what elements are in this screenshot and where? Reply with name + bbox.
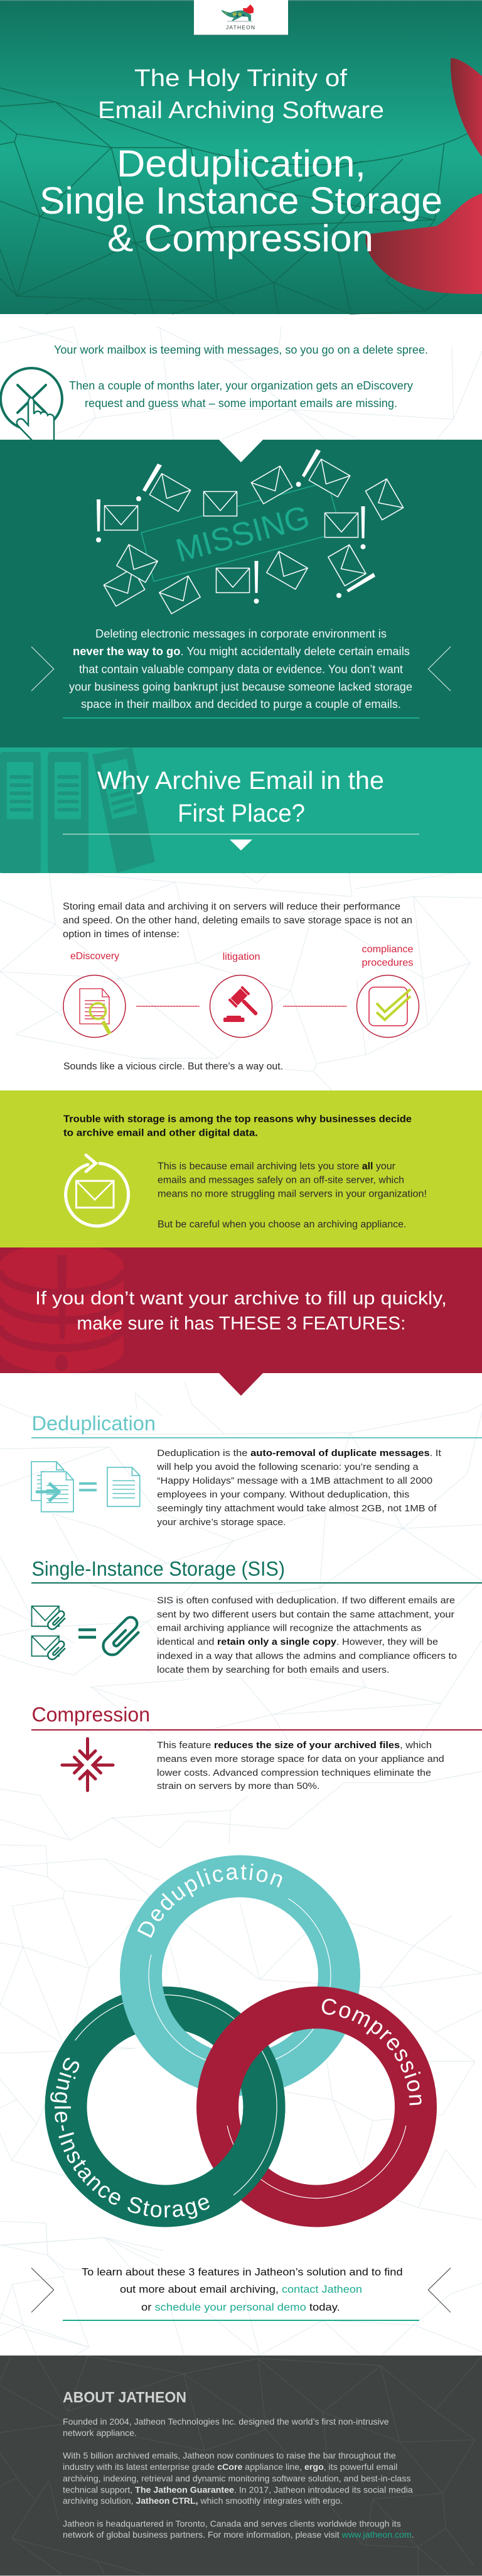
heading: why archive bbox=[97, 767, 384, 827]
text: vicious circle: Sounds like a vicious circle. But there’s a way out. bbox=[63, 1062, 283, 1072]
text block: storing email bbox=[63, 901, 412, 940]
text: SIS description: sent by two different users but contain the same attachment, your bbox=[157, 1609, 454, 1620]
heading: these 3 features: If you don’t want your archive to fill up quickly, bbox=[35, 1288, 447, 1309]
text: company description bbox=[63, 2416, 414, 2540]
call to action bbox=[31, 2266, 451, 2321]
panel: header banner bbox=[0, 0, 482, 314]
label: litigation: litigation bbox=[223, 952, 260, 962]
notch arrow bbox=[219, 440, 263, 462]
text: deduplication description: your archive’s storage space. bbox=[157, 1517, 286, 1528]
panel: trouble with storage bbox=[0, 1090, 482, 1247]
panel: deduplication bbox=[31, 1412, 482, 1528]
text: deduplication description bbox=[156, 1448, 442, 1528]
text block: storing email: and speed. On the other hand, deleting emails to save storage space is not an bbox=[63, 915, 412, 926]
text: contact jatheon: To learn about these 3 features in Jatheon’s solution and to find bbox=[82, 2266, 403, 2278]
text: archiving explanation: emails and messages safely on an off-site server, which bbox=[158, 1175, 404, 1186]
title: subtitle lines: Email Archiving Software bbox=[98, 97, 384, 124]
text: company description: network of global business partners. For more information, please visit www.jatheon.com. bbox=[63, 2530, 414, 2540]
heading: about jatheon: ABOUT JATHEON bbox=[63, 2389, 186, 2406]
ring: deduplication bbox=[141, 1876, 339, 2075]
text block: delete spree intro: request and guess what – some important emails are missing. bbox=[85, 397, 397, 410]
arrow: left chevron bbox=[31, 2268, 54, 2312]
logo wordmark: JATHEON bbox=[226, 24, 255, 30]
icon: inward arrows bbox=[62, 1739, 113, 1790]
stamp: missing bbox=[141, 482, 341, 582]
text: bold statement: to archive email and other digital data. bbox=[63, 1128, 258, 1138]
text: company description: industry with its latest enterprise grade cCore appliance line, ergo, its powerful email bbox=[63, 2462, 397, 2472]
panel: compression bbox=[31, 1704, 482, 1791]
arrow: right chevron bbox=[428, 647, 451, 691]
text: SIS description: identical and retain only a single copy . However, they will be bbox=[157, 1637, 438, 1648]
icon: envelopes and paperclips bbox=[31, 1606, 144, 1661]
icon: circular arrow envelope bbox=[66, 1155, 129, 1226]
heading: deduplication: Deduplication bbox=[31, 1412, 156, 1435]
text: archiving explanation: means no more struggling mail servers in your organization! bbox=[158, 1189, 427, 1200]
heading: why archive: First Place? bbox=[178, 800, 305, 827]
arrow: down triangle bbox=[230, 839, 252, 851]
exclamation marks bbox=[96, 449, 375, 604]
ring overlap: green over teal bbox=[207, 2048, 285, 2220]
icon: database warning bbox=[0, 1243, 124, 1373]
label: compliance procedures: procedures bbox=[362, 957, 413, 969]
text: archiving explanation bbox=[158, 1161, 427, 1230]
text: company description: archiving solution, Jatheon CTRL, which smoothly integrates with ergo. bbox=[63, 2496, 343, 2506]
text: SIS description: indexed in a way that allows the admins and compliance officers to bbox=[157, 1651, 457, 1661]
logo box bbox=[194, 0, 288, 35]
text: compression description: This feature reduces the size of your archived files , which bbox=[157, 1740, 432, 1751]
text block: never the way to go: space in their mailbox and decided to purge a couple of emails. bbox=[81, 698, 401, 710]
ring overlap: green over red bbox=[188, 2124, 284, 2225]
diagram: ediscovery litigation compliance bbox=[63, 944, 419, 1038]
label: compliance procedures bbox=[362, 944, 414, 969]
label: compliance procedures: compliance bbox=[362, 944, 414, 955]
stamp: missing: MISSING bbox=[172, 499, 314, 570]
text: deduplication description: seemingly tiny attachment would take almost 2GB, not 1MB of bbox=[157, 1503, 437, 1514]
text: deduplication description: Deduplication is the auto-removal of duplicate messages . It bbox=[157, 1448, 442, 1459]
text: archiving explanation: This is because email archiving lets you store all your bbox=[158, 1161, 395, 1172]
text block: never the way to go: your business going bankrupt just because someone lacked storage bbox=[69, 681, 412, 693]
text block: never the way to go: never the way to go. You might accidentally delete certain emails bbox=[73, 645, 410, 658]
icon: fox bbox=[221, 4, 254, 22]
diagram: three interlocking rings bbox=[45, 1856, 437, 2227]
icon: finger deleting bbox=[1, 368, 62, 441]
text: company description: Founded in 2004, Jatheon Technologies Inc. designed the world’s first non-intrusive bbox=[63, 2416, 389, 2427]
title: main heading: Deduplication, bbox=[117, 143, 366, 185]
text: SIS description: email archiving appliance will recognize the attachments as bbox=[157, 1623, 422, 1634]
ring: compression bbox=[217, 2008, 415, 2206]
text: bold statement: Trouble with storage is among the top reasons why businesses decide bbox=[63, 1114, 412, 1125]
text: company description: Jatheon is headquartered in Toronto, Canada and serves clients worldwide through its bbox=[63, 2518, 401, 2528]
text: company description: With 5 billion archived emails, Jatheon now continues to raise the bar throughout the bbox=[63, 2450, 396, 2460]
panel: about jatheon bbox=[0, 2356, 482, 2576]
text block: delete spree intro: Then a couple of months later, your organization gets an eDiscovery bbox=[69, 379, 413, 392]
text: deduplication description: employees in your company. Without deduplication, this bbox=[157, 1489, 409, 1500]
icon: duplicate documents bbox=[31, 1462, 140, 1512]
text: archiving explanation: But be careful when you choose an archiving appliance. bbox=[158, 1219, 407, 1230]
text block: delete spree intro bbox=[54, 344, 428, 410]
text block: never the way to go bbox=[69, 628, 412, 710]
text: compression description bbox=[157, 1740, 444, 1791]
text: contact jatheon: or schedule your personal demo today. bbox=[141, 2302, 340, 2313]
title: main heading: Single Instance Storage bbox=[40, 180, 442, 222]
heading: SIS: Single-Instance Storage (SIS) bbox=[31, 1557, 285, 1580]
red decorative shape: lower right bbox=[365, 193, 482, 294]
text: deduplication description: will help you avoid the following scenario: you’re sending a bbox=[156, 1462, 419, 1472]
text: company description: network appliance. bbox=[63, 2428, 137, 2438]
text: SIS description: SIS is often confused with deduplication. If two different emails are bbox=[157, 1595, 455, 1606]
text block: never the way to go: Deleting electronic messages in corporate environment is bbox=[95, 628, 387, 640]
text block: never the way to go: that contain valuable company data or evidence. You don’t want bbox=[79, 663, 403, 676]
heading: compression: Compression bbox=[31, 1704, 150, 1726]
arrow: left chevron bbox=[31, 647, 54, 691]
ring label: deduplication: Deduplication bbox=[137, 1863, 282, 1938]
text: company description: archiving, indexing, retrieval and dynamic monitoring software solution, and best-in-class bbox=[63, 2473, 410, 2483]
text block: delete spree intro: Your work mailbox is teeming with messages, so you go on a delete spree. bbox=[54, 344, 428, 356]
text: deduplication description: “Happy Holidays” message with a 1MB attachment to all 2000 bbox=[157, 1475, 432, 1486]
icon: document magnifier bbox=[63, 975, 126, 1038]
text: SIS description: locate them by searching for both emails and users. bbox=[157, 1665, 389, 1675]
ring label: single-instance storage: Single-Instance Storage bbox=[50, 2058, 210, 2219]
panel: why archive email bbox=[0, 747, 482, 873]
red decorative shape: upper right bbox=[451, 58, 482, 157]
title: subtitle lines: The Holy Trinity of bbox=[134, 65, 347, 92]
text block: storing email: Storing email data and archiving it on servers will reduce their performance bbox=[63, 901, 400, 912]
heading: these 3 features bbox=[35, 1288, 447, 1334]
title: subtitle lines bbox=[98, 65, 384, 124]
ring label: compression: Compression bbox=[321, 1999, 422, 2106]
text: compression description: strain on servers by more than 50%. bbox=[157, 1781, 319, 1791]
text: contact jatheon: out more about email archiving, contact Jatheon bbox=[120, 2283, 362, 2295]
title: main heading: & Compression bbox=[107, 217, 373, 259]
icon: server binders bbox=[0, 747, 155, 873]
title: main heading bbox=[40, 143, 442, 259]
icon: checkmark box bbox=[356, 975, 419, 1038]
label: eDiscovery: eDiscovery bbox=[70, 951, 119, 962]
text block: storing email: option in times of intense: bbox=[63, 929, 179, 940]
text: compression description: means even more storage space for data on your appliance and bbox=[157, 1754, 444, 1764]
panel: single-instance storage bbox=[31, 1557, 482, 1675]
ring: single-instance storage bbox=[66, 1995, 277, 2206]
text: contact jatheon bbox=[82, 2266, 403, 2313]
heading: why archive: Why Archive Email in the bbox=[97, 767, 384, 795]
text: SIS description bbox=[157, 1595, 457, 1675]
icon: gavel bbox=[210, 975, 272, 1038]
panel: 3 features banner bbox=[0, 1243, 482, 1396]
text: bold statement bbox=[63, 1114, 412, 1138]
arrow: right chevron bbox=[428, 2268, 451, 2312]
panel: missing emails bbox=[0, 440, 482, 747]
envelopes illustration bbox=[104, 459, 404, 614]
arrow: red notch bbox=[219, 1373, 263, 1396]
text: company description: technical support, The Jatheon Guarantee. In 2017, Jatheon introduced its social media bbox=[63, 2484, 413, 2494]
text: compression description: lower costs. Advanced compression techniques eliminate the bbox=[157, 1768, 431, 1778]
heading: these 3 features: make sure it has THESE 3 FEATURES: bbox=[77, 1313, 405, 1334]
